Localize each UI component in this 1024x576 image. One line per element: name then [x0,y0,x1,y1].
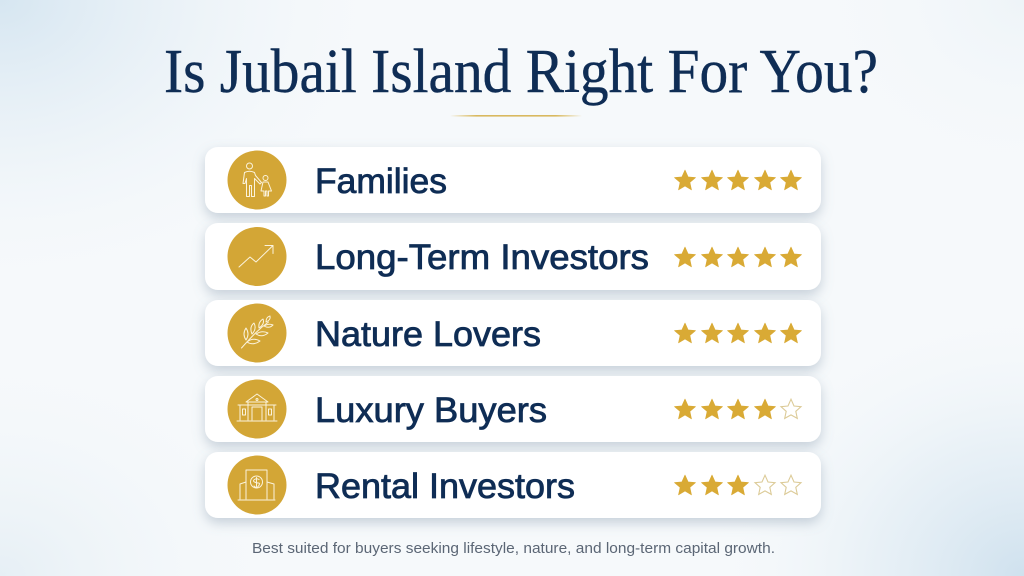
rating: 5 of 5 stars [674,323,802,343]
rating: 5 of 5 stars [674,170,802,190]
icon: rising chart arrow [228,227,286,286]
label: Long-Term Investors [315,238,649,277]
footer note: Best suited for buyers seeking lifestyle, nature, and long-term capital growth. [252,541,775,557]
rating: 5 of 5 stars [674,247,802,267]
row: Luxury Buyers [205,376,821,442]
row: Nature Lovers [205,300,821,366]
row: Families [205,147,821,213]
row: Long-Term Investors [205,223,821,290]
icon: parent and child [228,150,286,210]
label: Rental Investors [315,467,575,506]
title underline [450,115,582,117]
label: Nature Lovers [315,315,541,354]
row: Rental Investors [205,452,821,518]
icon: columned mansion [228,380,286,438]
rating: 4 of 5 stars [674,399,801,419]
rating: 3 of 5 stars [674,475,801,495]
icon: rental document with dollar [228,456,286,514]
icon: leafy branch [228,304,286,362]
label: Families [315,162,447,201]
title: Is Jubail Island Right For You? [164,38,878,106]
label: Luxury Buyers [315,391,547,430]
